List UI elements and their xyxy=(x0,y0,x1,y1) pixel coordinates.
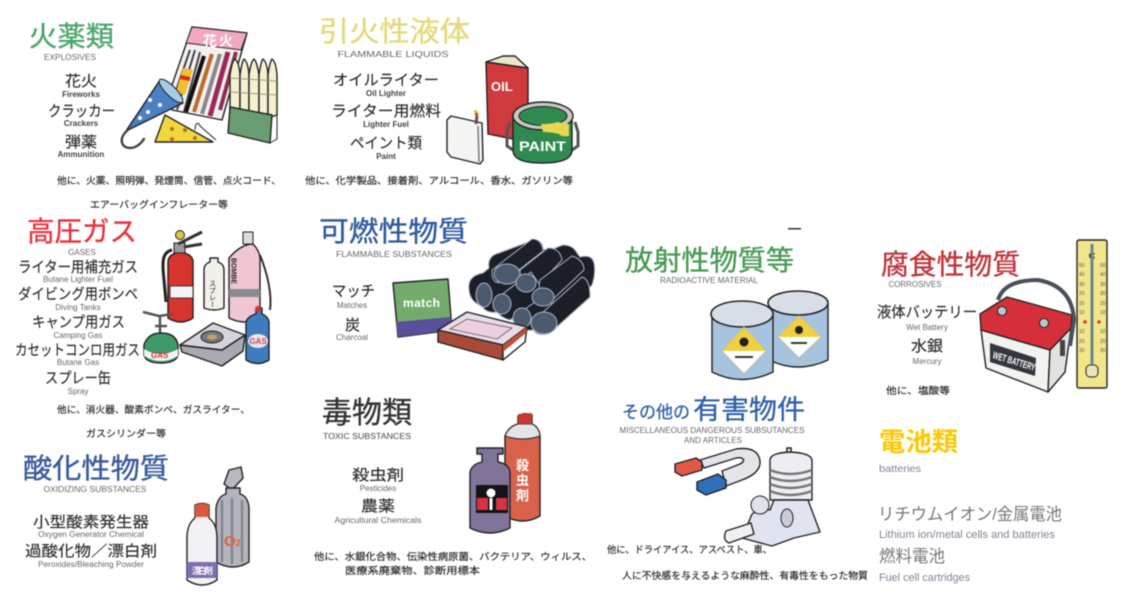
item list: explosives: 花火 xyxy=(65,73,97,90)
mark: top tick xyxy=(788,228,801,230)
heading: miscellaneous dangerous substances: 有害物件 xyxy=(693,395,805,425)
icon: blue gas can xyxy=(246,306,269,364)
item list: gases: キャンプ用ガス xyxy=(32,314,125,331)
subheading: explosives: EXPLOSIVES xyxy=(44,53,96,62)
item list: gases xyxy=(15,259,140,396)
icon: thermometer: 30 xyxy=(1100,348,1106,354)
panel: oxidizing substances xyxy=(23,453,249,585)
item list: oxidizing substances xyxy=(25,514,157,569)
note: gases: 他に、消火器、酸素ボンベ、ガスライター、 xyxy=(57,404,250,416)
icon: model engine xyxy=(725,448,820,546)
item list: flammable liquids: ペイント類 xyxy=(350,135,422,152)
item list: oxidizing substances: Peroxides/Bleaching Powder xyxy=(38,560,144,569)
heading: batteries: 電池類 xyxy=(879,427,958,457)
note: flammable liquids: 他に、化学製品、接着剤、アルコール、香水、ガソリン等 xyxy=(305,175,574,187)
heading: toxic substances: 毒物類 xyxy=(322,397,412,430)
note: explosives xyxy=(57,175,281,211)
subheading: flammable substances: FLAMMABLE SUBSTANCES xyxy=(336,250,452,259)
heading: miscellaneous dangerous substances xyxy=(622,395,805,425)
icon: oil can xyxy=(486,56,528,142)
subheading: miscellaneous dangerous substances: AND ARTICLES xyxy=(684,436,742,445)
note: gases: ガスシリンダー等 xyxy=(86,428,167,440)
item list: flammable liquids xyxy=(331,72,441,161)
item list: toxic substances xyxy=(334,467,422,525)
icon: thermometer: 30 xyxy=(1079,282,1085,288)
icon: thermometer: 10 xyxy=(1079,329,1085,335)
icon: thermometer: 50 xyxy=(1079,263,1085,269)
item list: flammable liquids: Oil Lighter xyxy=(366,89,406,98)
icon: matchbook xyxy=(393,279,452,337)
icon: matchbox xyxy=(438,312,527,360)
subheading: toxic substances: TOXIC SUBSTANCES xyxy=(323,432,411,441)
heading: flammable liquids: 引火性液体 xyxy=(319,16,470,47)
icon: oxygen canister: O2 xyxy=(224,533,241,550)
icon: insecticide spray xyxy=(505,413,540,521)
item list: flammable liquids: ライター用燃料 xyxy=(331,102,441,120)
heading: explosives: 火薬類 xyxy=(29,21,114,52)
heading: oxidizing substances: 酸化性物質 xyxy=(23,453,169,484)
item list: explosives: Ammunition xyxy=(58,150,104,159)
icon: camping burner: GAS xyxy=(151,351,169,360)
icon: fireworks bag xyxy=(155,115,216,142)
panel: explosives xyxy=(29,21,281,211)
item list: toxic substances: 殺虫剤 xyxy=(352,467,404,484)
note: toxic substances: 医療系廃棄物、診断用標本 xyxy=(345,565,481,577)
heading: flammable substances: 可燃性物質 xyxy=(319,216,468,247)
item list: gases: Camping Gas xyxy=(54,331,102,340)
note: miscellaneous dangerous substances: 他に、ドライアイス、アスベスト、車、 xyxy=(607,544,772,556)
item list: explosives: クラッカー xyxy=(48,103,115,120)
icon: fireworks pack xyxy=(170,27,247,120)
icon: insecticide spray: 殺 xyxy=(516,458,529,473)
item list: explosives: 弾薬 xyxy=(65,134,97,151)
icon: wet battery xyxy=(980,280,1074,392)
icon: thermometer: 10 xyxy=(1079,310,1085,316)
item list: flammable substances: Matches xyxy=(337,301,367,310)
note: miscellaneous dangerous substances: 人に不快感を与えるような麻酔性、有毒性をもった物質 xyxy=(622,570,868,582)
item list: corrosives: 液体バッテリー xyxy=(877,304,977,321)
item list: explosives: Fireworks xyxy=(62,90,100,99)
item list: gases: ライター用補充ガス xyxy=(18,259,138,276)
item list: flammable substances: マッチ xyxy=(332,283,375,300)
item list: batteries: 燃料電池 xyxy=(879,547,945,566)
item list: toxic substances: Pesticides xyxy=(360,484,396,493)
heading: corrosives: 腐食性物質 xyxy=(881,249,1020,280)
icon: blue gas can: GAS xyxy=(249,337,267,346)
note: miscellaneous dangerous substances xyxy=(607,544,868,582)
item list: gases: Butane Gas xyxy=(57,358,99,367)
icon: thermometer: 20 xyxy=(1079,301,1085,307)
item list: gases: Spray xyxy=(68,387,88,396)
icon: thermometer: 10 xyxy=(1100,329,1106,335)
subheading: batteries: batteries xyxy=(879,464,921,475)
panel: miscellaneous dangerous substances xyxy=(607,395,868,582)
icon: camping burner xyxy=(143,312,178,363)
item list: oxidizing substances: 過酸化物／漂白剤 xyxy=(25,543,157,560)
note: corrosives: 他に、塩酸等 xyxy=(886,385,951,397)
panel: flammable substances xyxy=(319,216,595,360)
note: explosives: エアーバッグインフレーター等 xyxy=(90,199,229,211)
item list: gases: Diving Tanks xyxy=(55,303,101,312)
panel: toxic substances xyxy=(314,397,592,577)
item list: gases: カセットコンロ用ガス xyxy=(15,342,140,359)
item list: flammable liquids: Lighter Fuel xyxy=(363,120,409,129)
icon: party cracker xyxy=(122,76,186,148)
icon: bleach bottle: 漂白剤 xyxy=(192,565,213,576)
item list: flammable liquids: オイルライター xyxy=(333,72,439,89)
icon: thermometer: 20 xyxy=(1079,291,1085,297)
item list: gases: スプレー缶 xyxy=(45,370,111,387)
item list: corrosives: Mercury xyxy=(913,357,941,366)
icon: thermometer: 20 xyxy=(1100,301,1106,307)
icon: radioactive drum right xyxy=(768,291,828,367)
item list: gases: ダイビング用ボンベ xyxy=(18,286,138,303)
icon: thermometer: 40 xyxy=(1079,272,1085,278)
note: explosives: 他に、火薬、照明弾、発煙筒、信管、点火コード、 xyxy=(57,175,281,187)
icon: lighter fuel xyxy=(447,110,483,164)
item list: flammable substances: 炭 xyxy=(345,317,360,334)
icon: charcoal xyxy=(469,239,595,335)
icon: thermometer: 30 xyxy=(1079,348,1085,354)
icon: magnet xyxy=(675,448,760,495)
icon: thermometer xyxy=(1077,240,1107,388)
item list: toxic substances: Agricultural Chemicals xyxy=(334,516,422,525)
item list: gases: Butane Lighter Fuel xyxy=(43,275,113,284)
note: toxic substances xyxy=(314,551,592,577)
subheading: oxidizing substances: OXIDIZING SUBSTANCES xyxy=(44,485,146,494)
icon: insecticide spray: 虫 xyxy=(516,473,529,488)
item list: batteries: Lithium ion/metal cells and batteries xyxy=(879,529,1055,541)
icon: thermometer: 50 xyxy=(1100,263,1106,269)
note: toxic substances: 他に、水銀化合物、伝染性病原菌、バクテリア、ウィルス、 xyxy=(314,551,592,563)
subheading: corrosives: CORROSIVES xyxy=(888,280,942,289)
icon: paint can xyxy=(507,102,578,163)
item list: flammable substances: Charcoal xyxy=(336,333,368,342)
note: gases xyxy=(57,404,250,440)
icon: thermometer: 40 xyxy=(1100,272,1106,278)
icon: oxygen tank: BOMBE xyxy=(230,258,236,284)
subheading: miscellaneous dangerous substances xyxy=(620,426,804,445)
icon: oil can: OIL xyxy=(491,79,513,94)
panel: gases xyxy=(15,216,271,440)
icon: paint can: PAINT xyxy=(519,138,567,154)
subheading: flammable liquids: FLAMMABLE LIQUIDS xyxy=(338,50,448,59)
item list: flammable liquids: Paint xyxy=(376,152,396,161)
panel: corrosives xyxy=(877,240,1107,397)
icon: radioactive drum left xyxy=(711,301,773,380)
icon: oxygen canister xyxy=(216,467,249,567)
icon: poison bottle xyxy=(470,448,510,533)
item list: batteries: Fuel cell cartridges xyxy=(879,572,970,584)
item list: oxidizing substances: Oxygen Generator Chemical xyxy=(38,530,144,539)
subheading: gases: GASES xyxy=(68,248,96,257)
item list: batteries: リチウムイオン/金属電池 xyxy=(878,505,1062,524)
icon: bleach bottle xyxy=(187,504,217,585)
icon: thermometer: 10 xyxy=(1100,310,1106,316)
icon: thermometer: 30 xyxy=(1100,291,1106,297)
item list: flammable substances xyxy=(332,283,375,342)
heading: gases: 高圧ガス xyxy=(27,216,137,247)
icon: fire extinguisher xyxy=(163,230,202,322)
item list: corrosives: Wet Battery xyxy=(906,323,948,332)
subheading: miscellaneous dangerous substances: MISCELLANEOUS DANGEROUS SUBSUTANCES xyxy=(620,426,804,435)
item list: oxidizing substances: 小型酸素発生器 xyxy=(33,514,149,531)
icon: spray can: スプレー xyxy=(208,280,216,308)
item list: toxic substances: 農薬 xyxy=(361,498,395,515)
panel: batteries xyxy=(878,427,1062,584)
item list: explosives xyxy=(48,73,115,159)
icon: insecticide spray: 剤 xyxy=(516,488,529,503)
icon: wet battery: WET BATTERY xyxy=(991,350,1037,374)
icon: cassette stove xyxy=(180,323,245,366)
icon: thermometer: 30 xyxy=(1100,282,1106,288)
item list: explosives: Crackers xyxy=(64,119,99,128)
subheading: radioactive material: RADIOACTIVE MATERIAL xyxy=(660,276,759,285)
item list: corrosives: 水銀 xyxy=(911,338,943,355)
icon: ammunition xyxy=(228,59,277,143)
icon: oxygen tank xyxy=(229,232,271,322)
icon: fireworks pack: 花火 xyxy=(203,33,233,49)
item list: corrosives xyxy=(877,304,977,366)
icon: thermometer: 20 xyxy=(1079,339,1085,345)
icon: matchbook: match xyxy=(403,296,440,310)
heading: radioactive material: 放射性物質等 xyxy=(625,245,794,276)
panel: flammable liquids xyxy=(305,16,578,187)
icon: spray can xyxy=(204,258,224,310)
panel: radioactive material xyxy=(625,228,828,380)
icon: thermometer: C xyxy=(1089,251,1096,261)
item list: batteries xyxy=(878,505,1062,584)
heading: miscellaneous dangerous substances: その他の xyxy=(622,403,690,422)
icon: thermometer: 20 xyxy=(1100,339,1106,345)
